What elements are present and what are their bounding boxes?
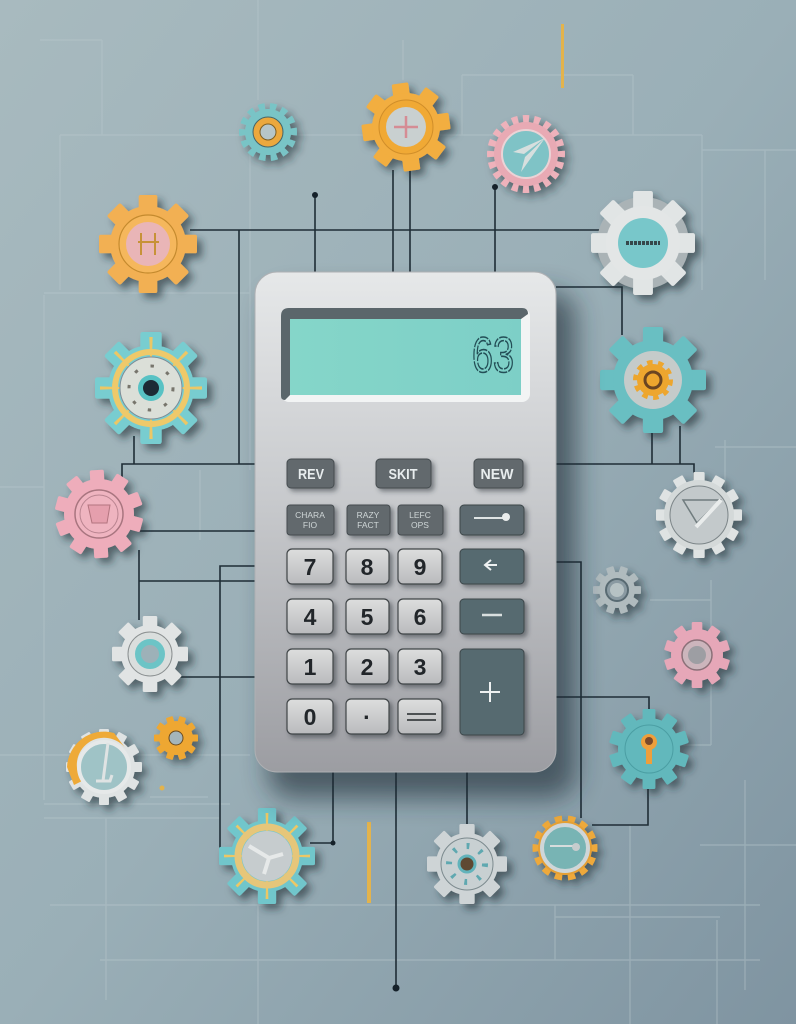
- function keys: RAZY: [357, 510, 380, 520]
- number keys: ·: [363, 704, 371, 730]
- display value: 63: [472, 327, 514, 383]
- number keys: 5: [361, 604, 374, 630]
- gear: small orange: [154, 716, 198, 760]
- number keys: 7: [304, 554, 316, 580]
- number keys: 2: [361, 654, 373, 680]
- function keys: CHARA: [295, 510, 325, 520]
- function keys: FIO: [303, 520, 317, 530]
- connector wires: [122, 170, 694, 988]
- number keys: 0: [304, 704, 316, 730]
- number keys: 8: [361, 554, 374, 580]
- gear: teal with orange inner cog: [600, 327, 706, 433]
- number keys: [287, 549, 442, 734]
- gear: pink with darts: [492, 120, 560, 188]
- gear: orange with gauge needle: [536, 819, 594, 877]
- function keys: OPS: [411, 520, 429, 530]
- function keys: [287, 459, 523, 535]
- calculator: [255, 272, 576, 798]
- number keys: 6: [414, 604, 426, 630]
- number keys: 3: [414, 654, 426, 680]
- calculator shadow: [268, 292, 576, 798]
- gear: white with teal dial: [427, 824, 507, 904]
- gear: white with triangle check: [656, 472, 742, 558]
- gear: teal and yellow with grey dial: [219, 808, 315, 904]
- gear: white with teal ring: [112, 616, 188, 692]
- number keys: 9: [414, 554, 426, 580]
- function keys: SKIT: [388, 466, 418, 483]
- function keys: LEFC: [409, 510, 431, 520]
- gear: pink with square symbol: [45, 460, 153, 568]
- gear: teal and yellow with dial: [95, 332, 207, 444]
- function keys: NEW: [480, 466, 514, 483]
- display: [281, 308, 530, 402]
- function keys: REV: [298, 466, 324, 483]
- gear: orange and white with gauge: [66, 729, 142, 805]
- yellow accent bars: [160, 24, 564, 903]
- gear: small teal with orange ring: [243, 107, 293, 157]
- gear: orange with pink centre: [99, 195, 197, 293]
- wire end dots: [312, 184, 498, 992]
- function keys: FACT: [357, 520, 379, 530]
- gear: white with teal centre: [591, 191, 695, 295]
- gear: teal with keyhole: [599, 699, 699, 799]
- calculator body: [255, 272, 556, 772]
- gear: orange with plus symbol: [356, 77, 456, 177]
- gear: small white ring: [593, 566, 641, 614]
- number keys: 1: [304, 654, 317, 680]
- number keys: 4: [304, 604, 317, 630]
- operator keys: [460, 505, 524, 735]
- gear: pink with grey centre: [655, 613, 739, 697]
